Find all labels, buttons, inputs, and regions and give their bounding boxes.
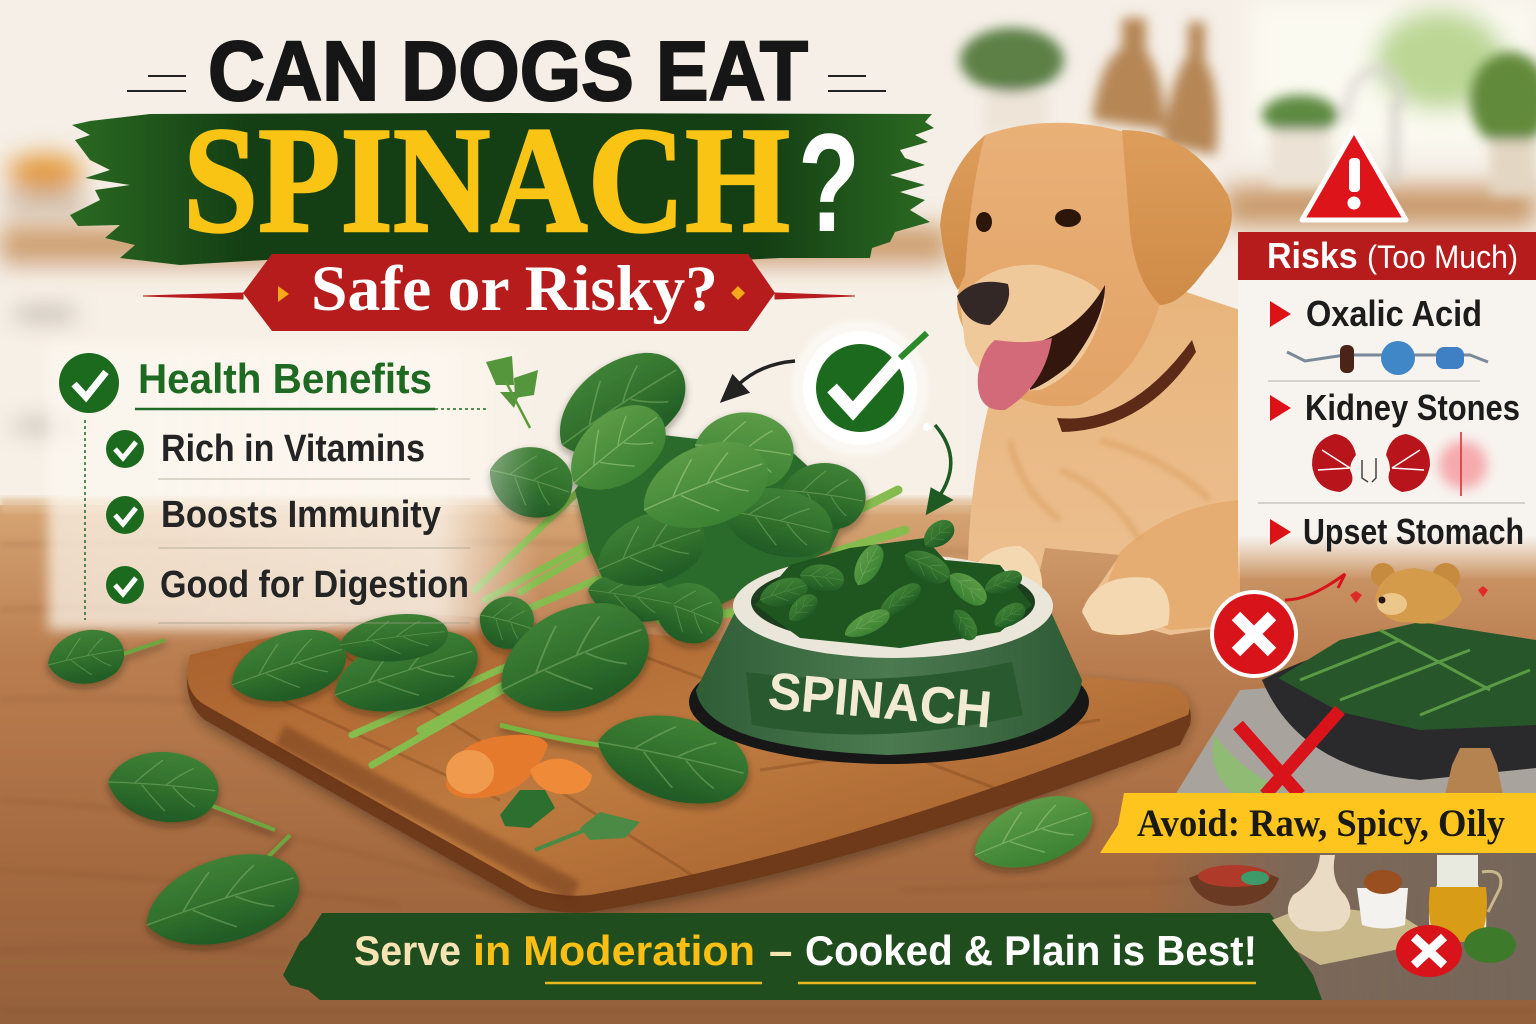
benefit: immunity: Boosts Immunity (161, 494, 441, 536)
avoid scene: plate and greens (1175, 622, 1536, 800)
avoid banner (1100, 793, 1536, 853)
check badge (792, 320, 928, 456)
spinach leaf pile (479, 334, 872, 654)
bowl label: SPINACH (766, 662, 994, 740)
risk: oxalic acid: Oxalic Acid (1306, 293, 1482, 334)
spinach leaves on board (223, 585, 758, 818)
panel: health benefits (59, 353, 486, 623)
spice pot (1357, 870, 1408, 928)
dog paws (966, 546, 1170, 635)
risk: oxalic acid (1270, 293, 1488, 375)
icon: warning triangle (1302, 130, 1406, 220)
dog body (968, 290, 1240, 635)
avoid banner: Avoid: Raw, Spicy, Oily (1137, 802, 1505, 845)
icon: small x badge (1396, 925, 1462, 977)
dog eyes (976, 209, 1081, 232)
dog right ear (1122, 130, 1232, 305)
dog nose (957, 282, 1009, 325)
small dish (1189, 865, 1279, 906)
title line: CAN DOGS EAT (208, 24, 808, 118)
dog (940, 123, 1240, 635)
avoid food items (1189, 855, 1516, 977)
subtitle banner: Safe or Risky? (311, 253, 718, 325)
heading: health benefits (59, 353, 486, 620)
garlic (1288, 855, 1350, 932)
dog collar (1057, 340, 1196, 432)
oil bottle (1445, 748, 1503, 795)
oil jar (1429, 855, 1501, 942)
icon: parsley sprig (486, 356, 538, 428)
bottom banner (283, 913, 1322, 1000)
panel: risks (1238, 130, 1536, 580)
heading: health benefits: Health Benefits (138, 355, 432, 402)
dog mouth (1030, 285, 1105, 390)
subtitle banner (143, 253, 855, 331)
arrow: check to bowl (923, 423, 951, 512)
dog left ear (940, 135, 1000, 290)
cutting board (187, 615, 1191, 917)
bottom banner: Cooked & Plain is Best! (805, 927, 1257, 974)
green brush banner with SPINACH: SPINACH (183, 96, 790, 264)
risks heading: Risks (Too Much) (1267, 235, 1518, 276)
spinach stems (352, 490, 905, 765)
arrow: check to leaves (723, 361, 795, 400)
bottom banner: – (769, 927, 792, 974)
bowl spinach (755, 515, 1032, 648)
carrots and herbs (446, 735, 640, 850)
leaves on table (44, 626, 1101, 961)
bottom right slate surface (1150, 853, 1536, 1000)
panel: benefits backdrop (48, 345, 538, 630)
dog tongue (978, 338, 1052, 410)
herbs (1272, 905, 1424, 965)
dog muzzle (960, 265, 1105, 390)
benefit: vitamins: Rich in Vitamins (161, 428, 425, 470)
bottom banner: in Moderation (473, 927, 755, 974)
green brush banner with SPINACH: ? (798, 104, 860, 261)
spinach dog bowl (689, 515, 1089, 764)
icon: red x badge (1210, 574, 1345, 678)
icon: teddy bear (1350, 563, 1488, 624)
risk: kidney stones (1270, 387, 1520, 496)
dog head (957, 123, 1165, 406)
icon: red cross strokes (1238, 710, 1340, 795)
bottom banner: Serve (354, 927, 461, 974)
benefit: digestion: Good for Digestion (160, 564, 469, 606)
